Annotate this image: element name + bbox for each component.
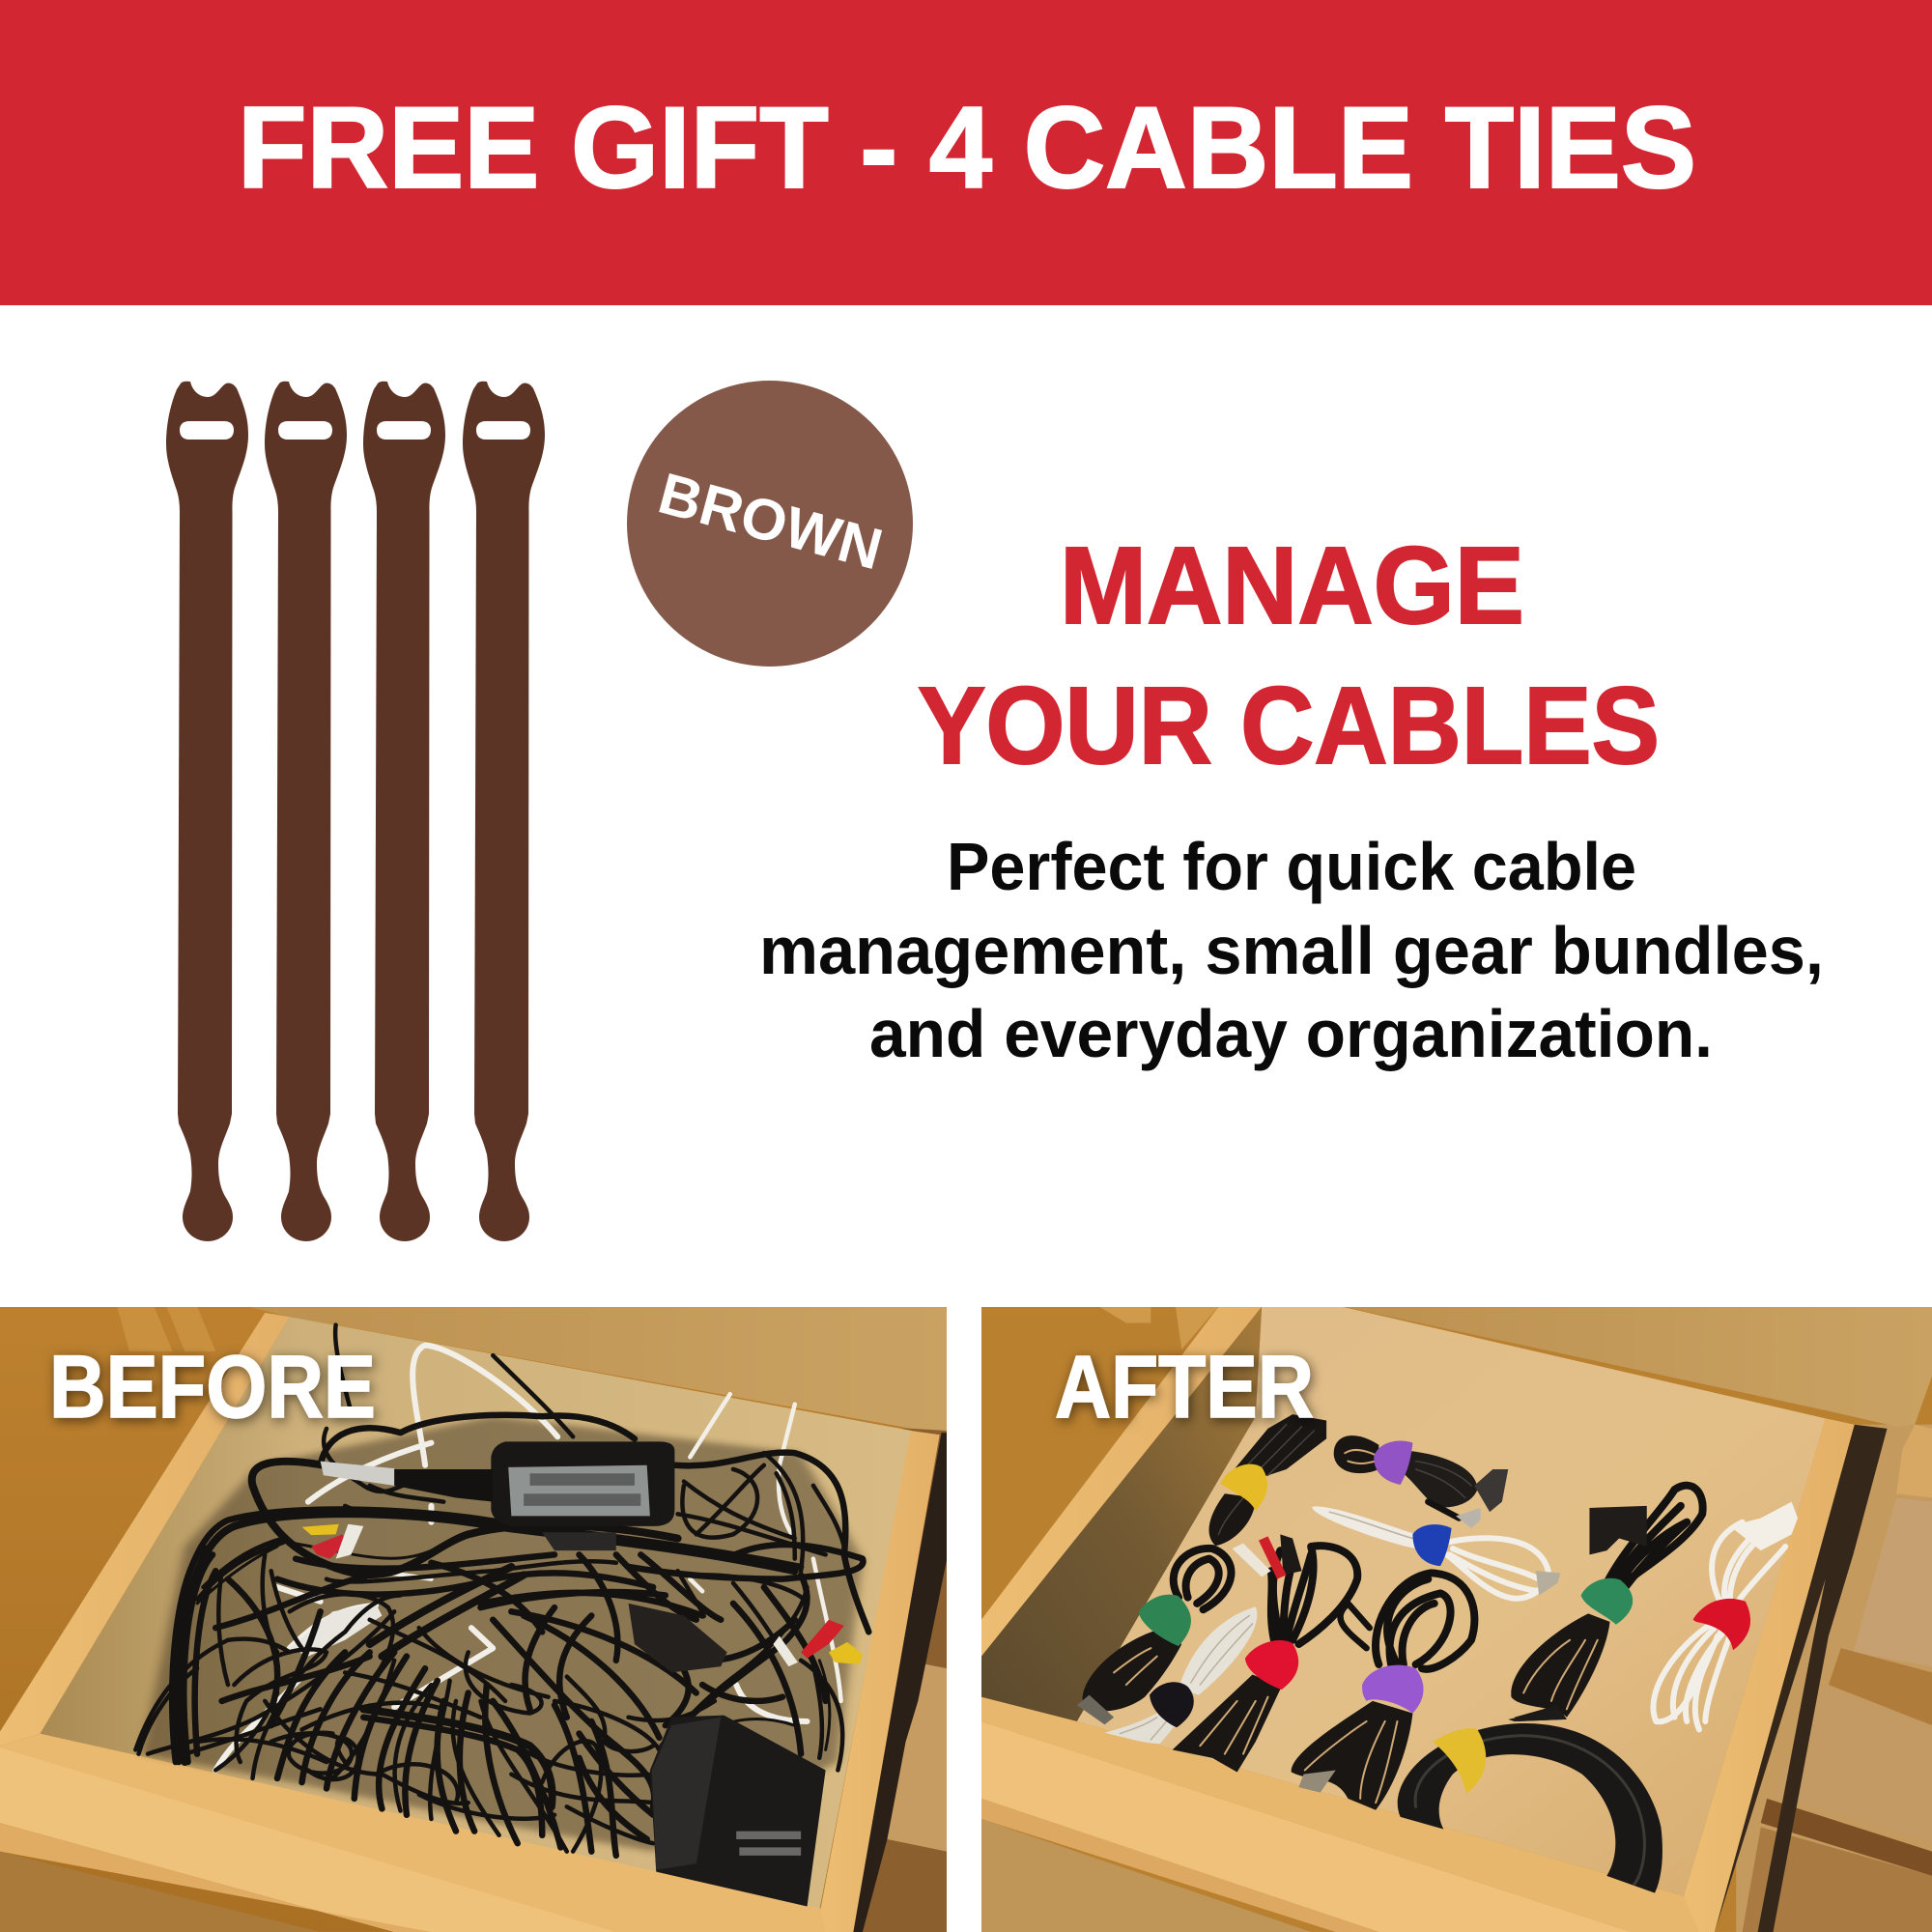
drawer floor bbox=[40, 1317, 912, 1911]
drawer floor bbox=[1077, 1307, 1826, 1896]
black cables bbox=[135, 1325, 868, 1856]
front rim bbox=[981, 1697, 1699, 1932]
bundle: black with yellow tie bbox=[1209, 1414, 1326, 1546]
right rim bbox=[1684, 1418, 1855, 1932]
upper drawer front bbox=[1342, 1306, 1932, 1427]
bundle: black with purple tie bbox=[1334, 1435, 1508, 1528]
icon: wall charger bbox=[629, 1604, 727, 1672]
bundle: white with red tie bbox=[1653, 1502, 1798, 1729]
coil: black with yellow tie bbox=[1398, 1709, 1662, 1893]
front rim bbox=[0, 1734, 826, 1932]
bundle: black with green tie, right bbox=[1511, 1486, 1703, 1721]
title: FREE GIFT - 4 CABLE TIES bbox=[238, 83, 1696, 213]
right rim bbox=[819, 1431, 940, 1932]
photo: after, organised cables in drawer bbox=[981, 1294, 1932, 1932]
left rim bbox=[0, 1313, 290, 1746]
upper drawer front bbox=[246, 1306, 947, 1431]
bundle: black with green tie bbox=[1077, 1548, 1231, 1724]
bundle: black with purple tie, large bbox=[1292, 1573, 1474, 1810]
bundle: white with black tie bbox=[1105, 1606, 1257, 1744]
description text: management, small gear bundles, bbox=[759, 913, 1824, 988]
left inner wall bbox=[981, 1307, 1262, 1721]
description text: Perfect for quick cable bbox=[947, 829, 1636, 904]
description text: and everyday organization. bbox=[869, 996, 1713, 1071]
description text bbox=[759, 829, 1824, 1071]
heading: manage your cables: MANAGE bbox=[1060, 525, 1524, 646]
heading: manage your cables: YOUR CABLES bbox=[918, 665, 1660, 786]
colour badge: brown bbox=[627, 381, 913, 667]
bundle: black with red tie and plugs bbox=[1173, 1534, 1357, 1773]
header banner bbox=[0, 0, 1932, 305]
badge label: BROWN bbox=[652, 461, 889, 582]
product: four brown cable ties bbox=[166, 382, 545, 1241]
label: after: AFTER bbox=[1055, 1338, 1314, 1436]
RCA plugs bbox=[302, 1524, 863, 1666]
photo: before, tangled cables in drawer bbox=[0, 1294, 949, 1932]
icon: power adapter with label bbox=[321, 1441, 674, 1550]
white cables bbox=[215, 1346, 841, 1770]
dark gap and runner bbox=[1709, 1425, 1888, 1932]
icon: router box bbox=[650, 1716, 826, 1906]
left rim bbox=[981, 1307, 1262, 1657]
label: before: BEFORE bbox=[49, 1338, 376, 1436]
heading: manage your cables bbox=[918, 525, 1660, 786]
cable pile shade bbox=[142, 1416, 863, 1852]
bundle: white with blue tie bbox=[1312, 1506, 1560, 1599]
